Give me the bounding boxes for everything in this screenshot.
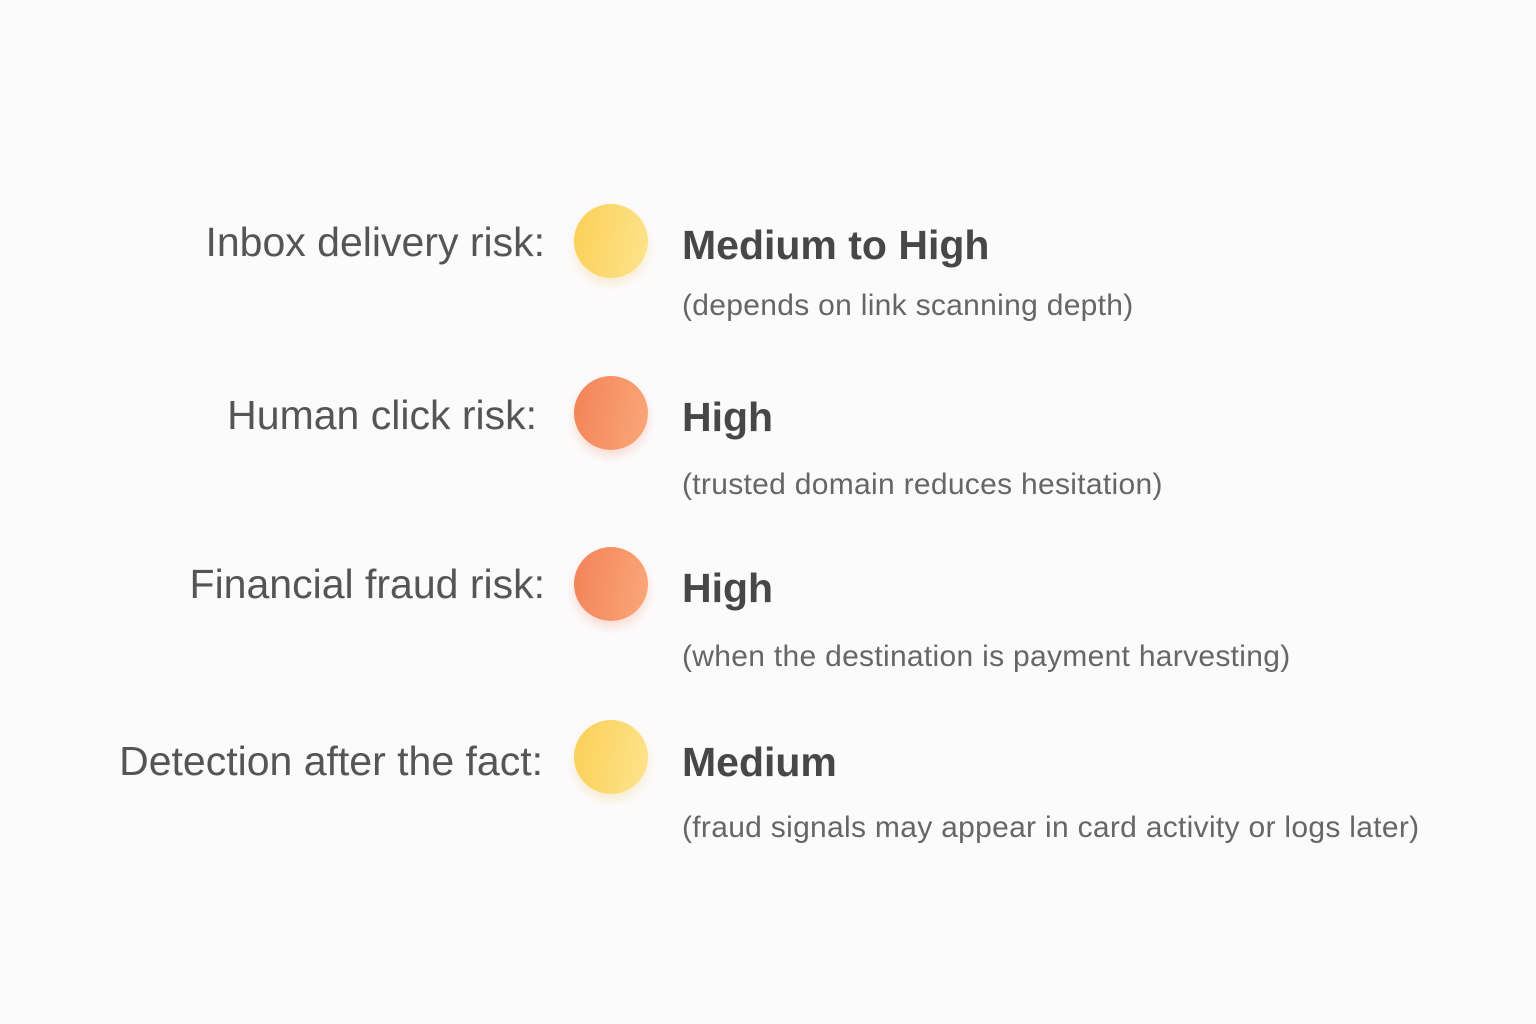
row: detection after the fact — [119, 720, 1419, 844]
row: human click risk — [227, 376, 1163, 501]
label: Inbox delivery risk: — [205, 219, 545, 265]
value: Medium — [682, 739, 837, 785]
icon: yellow dot — [574, 720, 648, 794]
label: Human click risk: — [227, 392, 537, 438]
value: Medium to High — [682, 222, 989, 268]
icon: orange dot — [574, 376, 648, 450]
row: inbox delivery risk — [205, 204, 1134, 322]
note: (when the destination is payment harvesting) — [682, 640, 1291, 673]
icon: yellow dot — [574, 204, 648, 278]
icon: orange dot — [574, 547, 648, 621]
row: financial fraud risk — [190, 547, 1291, 673]
label: Financial fraud risk: — [190, 561, 545, 607]
label: Detection after the fact: — [119, 738, 543, 784]
note: (trusted domain reduces hesitation) — [682, 468, 1163, 501]
note: (depends on link scanning depth) — [682, 289, 1134, 322]
value: High — [682, 394, 773, 440]
value: High — [682, 565, 773, 611]
note: (fraud signals may appear in card activity or logs later) — [682, 811, 1419, 844]
